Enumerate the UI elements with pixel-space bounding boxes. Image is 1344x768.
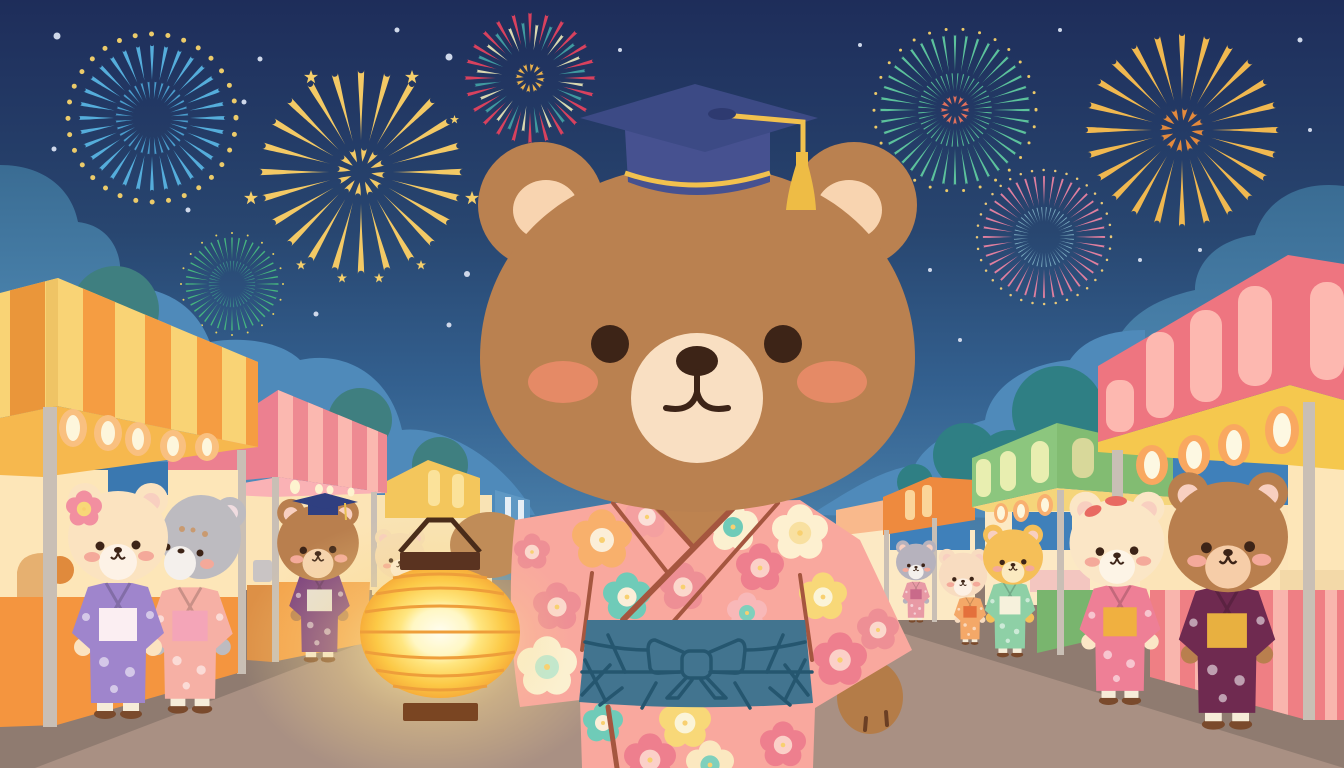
- bear ears: [478, 142, 917, 268]
- stall: right red: [1098, 255, 1344, 720]
- small bear: cream in orange kimono: [939, 549, 987, 645]
- stall: right green: [972, 423, 1173, 655]
- small bear: cream background: [375, 529, 425, 579]
- bear muzzle: [631, 333, 763, 463]
- small bear: cream in pink kimono: [1070, 492, 1164, 705]
- stall: far left yellow: [372, 460, 530, 595]
- bear arm and hand holding lantern: [450, 512, 530, 578]
- flower hair ornament: [66, 491, 102, 526]
- firework: red: [456, 4, 604, 152]
- gold stars around firework: [244, 70, 479, 282]
- kimono flower pattern: [514, 494, 899, 768]
- small graduation cap: [292, 493, 358, 520]
- main bear: [430, 84, 917, 768]
- grey bear head: [161, 495, 246, 580]
- small bear: grey in pink kimono: [147, 495, 246, 714]
- obi sash: [579, 620, 813, 708]
- small bear: brown with graduation cap: [277, 493, 359, 663]
- small bear: cream in purple kimono: [66, 483, 168, 719]
- red hair bow: [1083, 496, 1127, 519]
- lantern light on sleeve: [511, 594, 548, 690]
- ground street: [0, 580, 1344, 768]
- kimono: [511, 494, 912, 768]
- small bear: yellow in green kimono: [983, 525, 1043, 657]
- firework: blue: [68, 34, 236, 202]
- clouds: left: [0, 165, 535, 520]
- bear head: [480, 165, 915, 512]
- bear eyes: [591, 325, 802, 363]
- bear cheeks: [528, 361, 867, 403]
- small bear: brown in maroon kimono: [1168, 472, 1288, 730]
- bear right hand: [837, 660, 903, 734]
- firework: orange yellow: [1085, 33, 1279, 227]
- kimono collar: [582, 500, 812, 768]
- firework: small green: [181, 233, 283, 335]
- bear nose and mouth: [666, 346, 728, 409]
- firework: big yellow: [244, 70, 479, 282]
- tassel: [786, 152, 816, 210]
- stall: far right peach and orange: [836, 477, 975, 622]
- scattered stars: [52, 28, 1312, 402]
- graduation cap: [580, 84, 818, 210]
- firework: teal green: [874, 29, 1036, 191]
- stall: left orange and yellow: [0, 270, 260, 727]
- paper lantern: [360, 520, 520, 721]
- clouds: right: [810, 185, 1344, 520]
- small bear: grey far right: [896, 540, 936, 623]
- lantern glow on street: [240, 515, 620, 768]
- stall: left pink: [167, 385, 388, 674]
- firework: pink purple: [977, 170, 1111, 304]
